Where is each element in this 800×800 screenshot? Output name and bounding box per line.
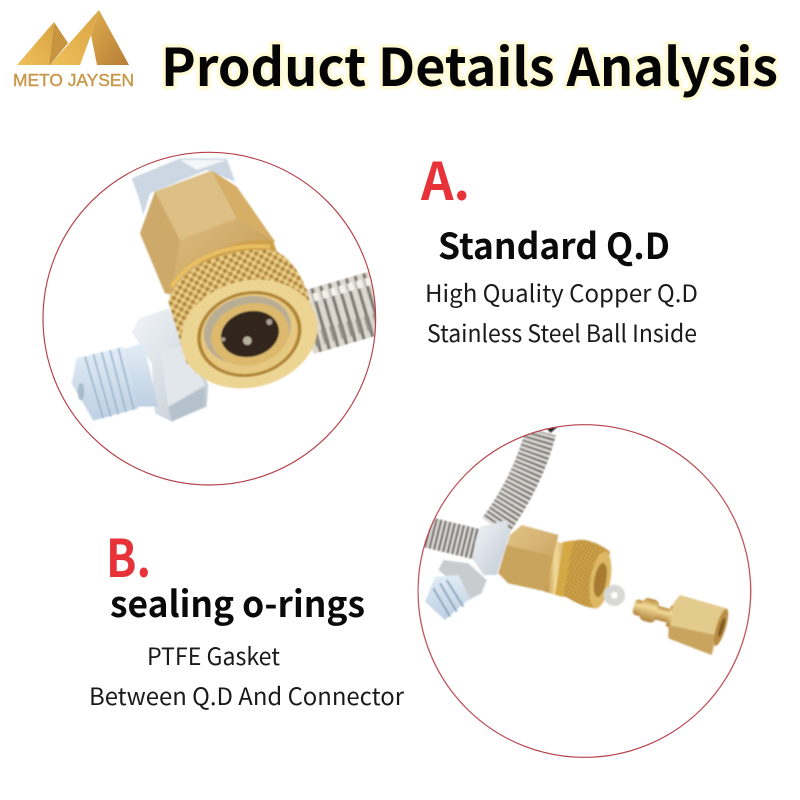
icon: silver hex block bbox=[132, 308, 208, 422]
icon: horizontal steel hose bbox=[425, 532, 480, 545]
icon: brass collar bbox=[198, 240, 278, 266]
label B: B. bbox=[106, 517, 151, 592]
icon: black hose end bbox=[546, 428, 558, 434]
panel: circular photo A, quick disconnect bbox=[43, 152, 380, 485]
text: PTFE Gasket: PTFE Gasket bbox=[147, 637, 280, 672]
icon: threaded fitting bbox=[425, 575, 470, 620]
icon: silver top nut bbox=[132, 158, 235, 215]
icon: knurled sleeve bbox=[563, 540, 610, 608]
heading: sealing o-rings: sealing o-rings bbox=[110, 576, 365, 628]
icon: brass neck bbox=[544, 541, 564, 597]
icon: PTFE o-ring bbox=[604, 585, 625, 606]
icon: stainless steel hose bbox=[305, 278, 380, 342]
circle outline bbox=[43, 152, 376, 485]
icon: knurled sleeve bbox=[168, 248, 312, 364]
circle outline bbox=[418, 425, 751, 757]
icon: brass connector plug bbox=[631, 595, 731, 655]
panel: circular photo B, connector and o-ring bbox=[418, 417, 751, 757]
text: High Quality Copper Q.D: High Quality Copper Q.D bbox=[425, 274, 698, 309]
title: Product Details Analysis bbox=[161, 26, 778, 101]
text: Stainless Steel Ball Inside: Stainless Steel Ball Inside bbox=[427, 314, 697, 349]
label A: A. bbox=[420, 140, 470, 215]
heading: Standard Q.D: Standard Q.D bbox=[438, 218, 670, 270]
icon: brass hex body bbox=[140, 171, 275, 297]
icon: silver hex block bbox=[438, 560, 487, 602]
icon: brass hex body bbox=[498, 525, 558, 592]
brand name: METO JAYSEN bbox=[13, 70, 134, 90]
icon: silver nut bbox=[473, 520, 510, 575]
icon: threaded fitting bbox=[72, 343, 158, 421]
icon: vertical steel hose bbox=[495, 432, 541, 527]
logo: Meto Jaysen bbox=[13, 10, 134, 90]
text: Between Q.D And Connector: Between Q.D And Connector bbox=[89, 677, 405, 712]
icon: coupler face bbox=[180, 278, 318, 390]
icon: golden mountains bbox=[17, 10, 129, 65]
